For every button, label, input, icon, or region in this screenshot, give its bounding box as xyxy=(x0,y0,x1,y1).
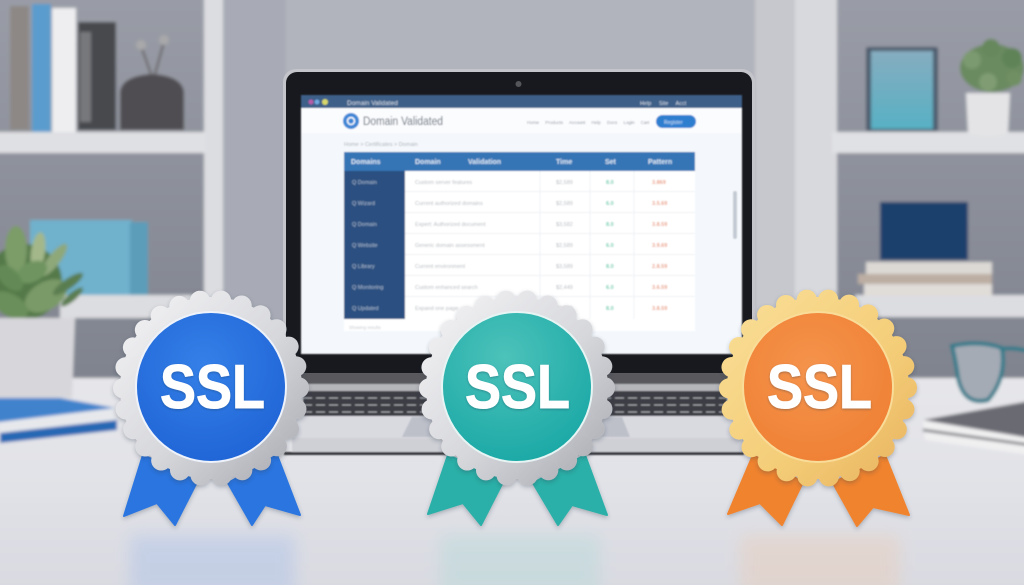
table sidebar: Q Website xyxy=(352,243,378,249)
table rows: $2,589 xyxy=(556,306,573,312)
table sidebar: Q Library xyxy=(352,264,375,270)
teal storage box xyxy=(30,220,148,295)
wall xyxy=(0,0,1024,390)
table rows: 6.0 xyxy=(606,243,614,249)
keyboard xyxy=(303,391,727,416)
table rows xyxy=(405,171,695,319)
table rows: 3.5.69 xyxy=(652,201,667,207)
nav button xyxy=(656,115,696,128)
table rows: Expand one page xyxy=(415,306,458,312)
table rows: 6.0 xyxy=(606,201,614,207)
table header: Time xyxy=(556,159,572,166)
table rows: Expert: Authorized document xyxy=(415,222,486,228)
blue disc xyxy=(136,312,286,462)
left shelving unit xyxy=(0,0,286,390)
table footer: Showing results xyxy=(349,325,382,330)
nav links: Home Products Account Help Docs Login Cart xyxy=(527,120,650,125)
table rows: Custom server features xyxy=(415,180,472,186)
left potted plant xyxy=(0,226,86,398)
table header: Set xyxy=(605,159,617,166)
orange disc xyxy=(743,312,893,462)
table header: Domain xyxy=(415,159,441,166)
table sidebar: Q Monitoring xyxy=(352,285,384,291)
SSL label: SSL xyxy=(160,353,265,422)
window top bar: Domain Validated xyxy=(347,100,398,107)
window top bar: Help Site Acct xyxy=(640,101,687,107)
ribbon xyxy=(124,455,300,525)
trackpad xyxy=(402,417,630,437)
table footer xyxy=(344,319,695,331)
table sidebar: Q Domain xyxy=(352,222,377,228)
table rows: 3.869 xyxy=(652,180,666,186)
laptop xyxy=(283,69,755,455)
logo xyxy=(343,113,359,129)
teal glasses xyxy=(952,343,1024,401)
table rows: $2,449 xyxy=(556,285,573,291)
table rows: $3,582 xyxy=(556,222,573,228)
table header xyxy=(344,152,695,171)
table rows: $2,589 xyxy=(556,180,573,186)
potted plant top right xyxy=(960,39,1024,136)
badge: orange SSL xyxy=(727,297,909,526)
ribbon xyxy=(728,455,909,526)
table header: Domains xyxy=(351,159,381,166)
table rows: 3.8.59 xyxy=(652,222,667,228)
reflections on desk xyxy=(130,535,900,585)
badge: teal SSL xyxy=(426,297,608,525)
table rows: $2,589 xyxy=(556,243,573,249)
scrollbar xyxy=(733,191,737,239)
books on top left shelf xyxy=(10,4,116,132)
blue notebook xyxy=(0,398,117,443)
table sidebar: Q Wizard xyxy=(352,201,375,207)
silver seal xyxy=(120,297,302,479)
table rows: 2.8.59 xyxy=(652,264,667,270)
table rows: 8.0 xyxy=(606,180,614,186)
table header: Validation xyxy=(468,159,501,166)
screen xyxy=(301,95,742,354)
table rows: 3.8.59 xyxy=(652,306,667,312)
table rows: Generic domain assessment xyxy=(415,243,485,249)
SSL label: SSL xyxy=(465,353,570,422)
nav button: Register xyxy=(664,120,683,126)
table rows: $3,589 xyxy=(556,264,573,270)
gold seal xyxy=(727,297,909,479)
table rows: 6.0 xyxy=(606,285,614,291)
table rows: 3.6.59 xyxy=(652,285,667,291)
table rows: 8.0 xyxy=(606,222,614,228)
SSL label: SSL xyxy=(767,353,872,422)
table rows: $2,589 xyxy=(556,201,573,207)
page header xyxy=(301,108,742,133)
lid xyxy=(283,69,755,373)
table rows: Current environment xyxy=(415,264,466,270)
table sidebar: Q Domain xyxy=(352,180,377,186)
desk surface xyxy=(0,378,1024,585)
badge: blue SSL xyxy=(120,297,302,525)
dark vase xyxy=(120,35,184,130)
ribbon xyxy=(428,455,607,525)
table rows: 8.0 xyxy=(606,306,614,312)
teal disc xyxy=(442,312,592,462)
table rows: Current authorized domains xyxy=(415,201,483,207)
navy box and stacked books xyxy=(858,202,992,296)
teal picture frame xyxy=(866,47,938,131)
silver seal xyxy=(426,297,608,479)
stacked notebooks right xyxy=(923,401,1024,455)
table rows: 8.0 xyxy=(606,264,614,270)
breadcrumb: Home > Certificates > Domain xyxy=(344,142,418,148)
page heading: Domain Validated xyxy=(363,116,443,128)
data table xyxy=(344,152,695,331)
right shelving unit xyxy=(755,0,1024,390)
window top bar xyxy=(301,95,742,108)
table rows: Custom enhanced search xyxy=(415,285,478,291)
table rows: 3.9.69 xyxy=(652,243,667,249)
table sidebar: Q Updated xyxy=(352,306,379,312)
laptop base xyxy=(284,372,748,455)
webcam xyxy=(516,81,522,87)
table sidebar xyxy=(344,171,405,319)
table header: Pattern xyxy=(648,159,672,166)
